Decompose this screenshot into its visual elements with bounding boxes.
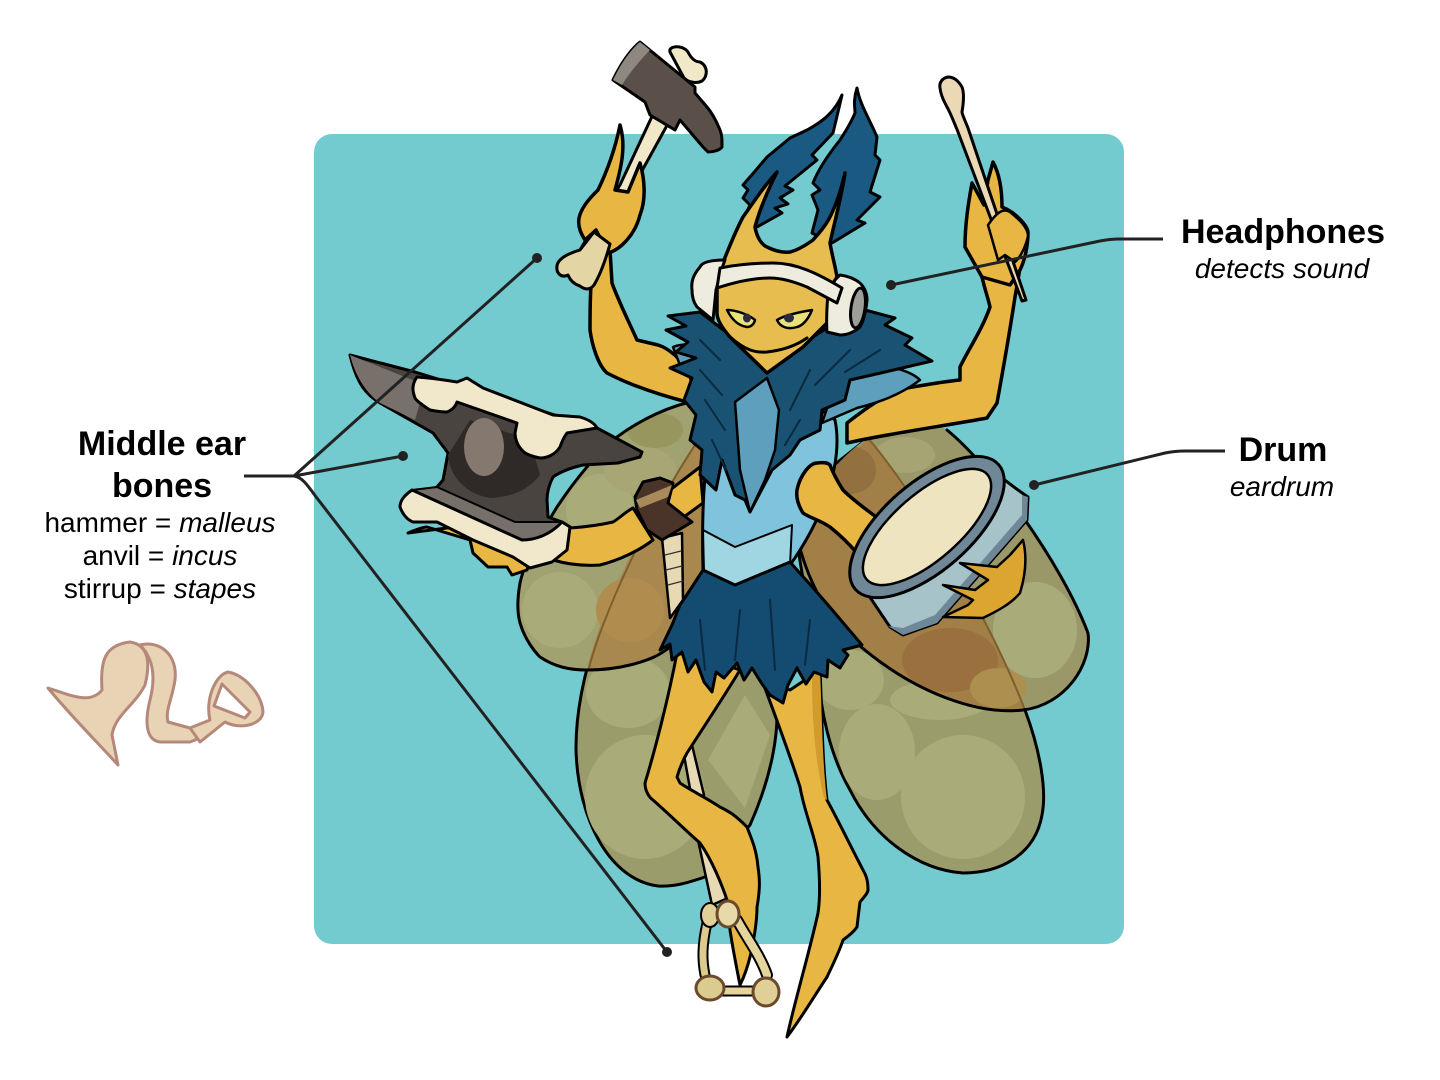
stirrup bones and ties [696,901,779,1006]
fur skirt [660,562,862,703]
lower right wing [790,438,1044,873]
drum [826,431,1028,635]
drum claw hand [943,540,1025,618]
drumstick [940,77,1026,301]
callout dots [398,253,1039,957]
lower right arm [797,463,880,553]
legs [645,653,868,1037]
headphones [692,260,868,335]
label: headphones: detects sound [1195,253,1371,284]
lower left wing [574,650,778,888]
collar fur strands [700,340,880,670]
label: headphones [1181,213,1385,284]
label: middle ear bones: bones [112,467,212,505]
label: drum [1230,431,1334,502]
lower hammer bone end [557,232,610,289]
label: middle ear bones: anvil = incus [83,540,237,571]
teal background panel [314,134,1124,944]
upper right wing [790,425,1088,730]
label: middle ear bones: hammer = malleus [44,507,276,538]
left fist [579,125,644,253]
callout lines [244,239,1225,952]
chest plate [735,378,779,512]
label: drum: Drum [1239,431,1327,469]
icon: ossicles [48,642,263,765]
right hand [965,162,1028,285]
torso vest [673,344,920,587]
fur collar [666,310,932,512]
hammer [557,42,722,289]
anvil with bone [350,355,642,575]
right fingers [988,210,1028,262]
label: headphones: Headphones [1181,213,1385,251]
tail bones [662,533,728,905]
insect figure [350,42,1088,1037]
head [717,172,845,373]
label: middle ear bones: Middle ear [78,425,246,463]
label: middle ear bones: stirrup = stapes [64,573,256,604]
label: middle ear bones [44,425,276,604]
head plumes [743,88,880,243]
upper right arm [847,268,1020,443]
label: drum: eardrum [1230,471,1334,502]
upper left arm [590,250,694,402]
lower left arm and glove [553,467,703,565]
upper left wing [516,402,703,672]
